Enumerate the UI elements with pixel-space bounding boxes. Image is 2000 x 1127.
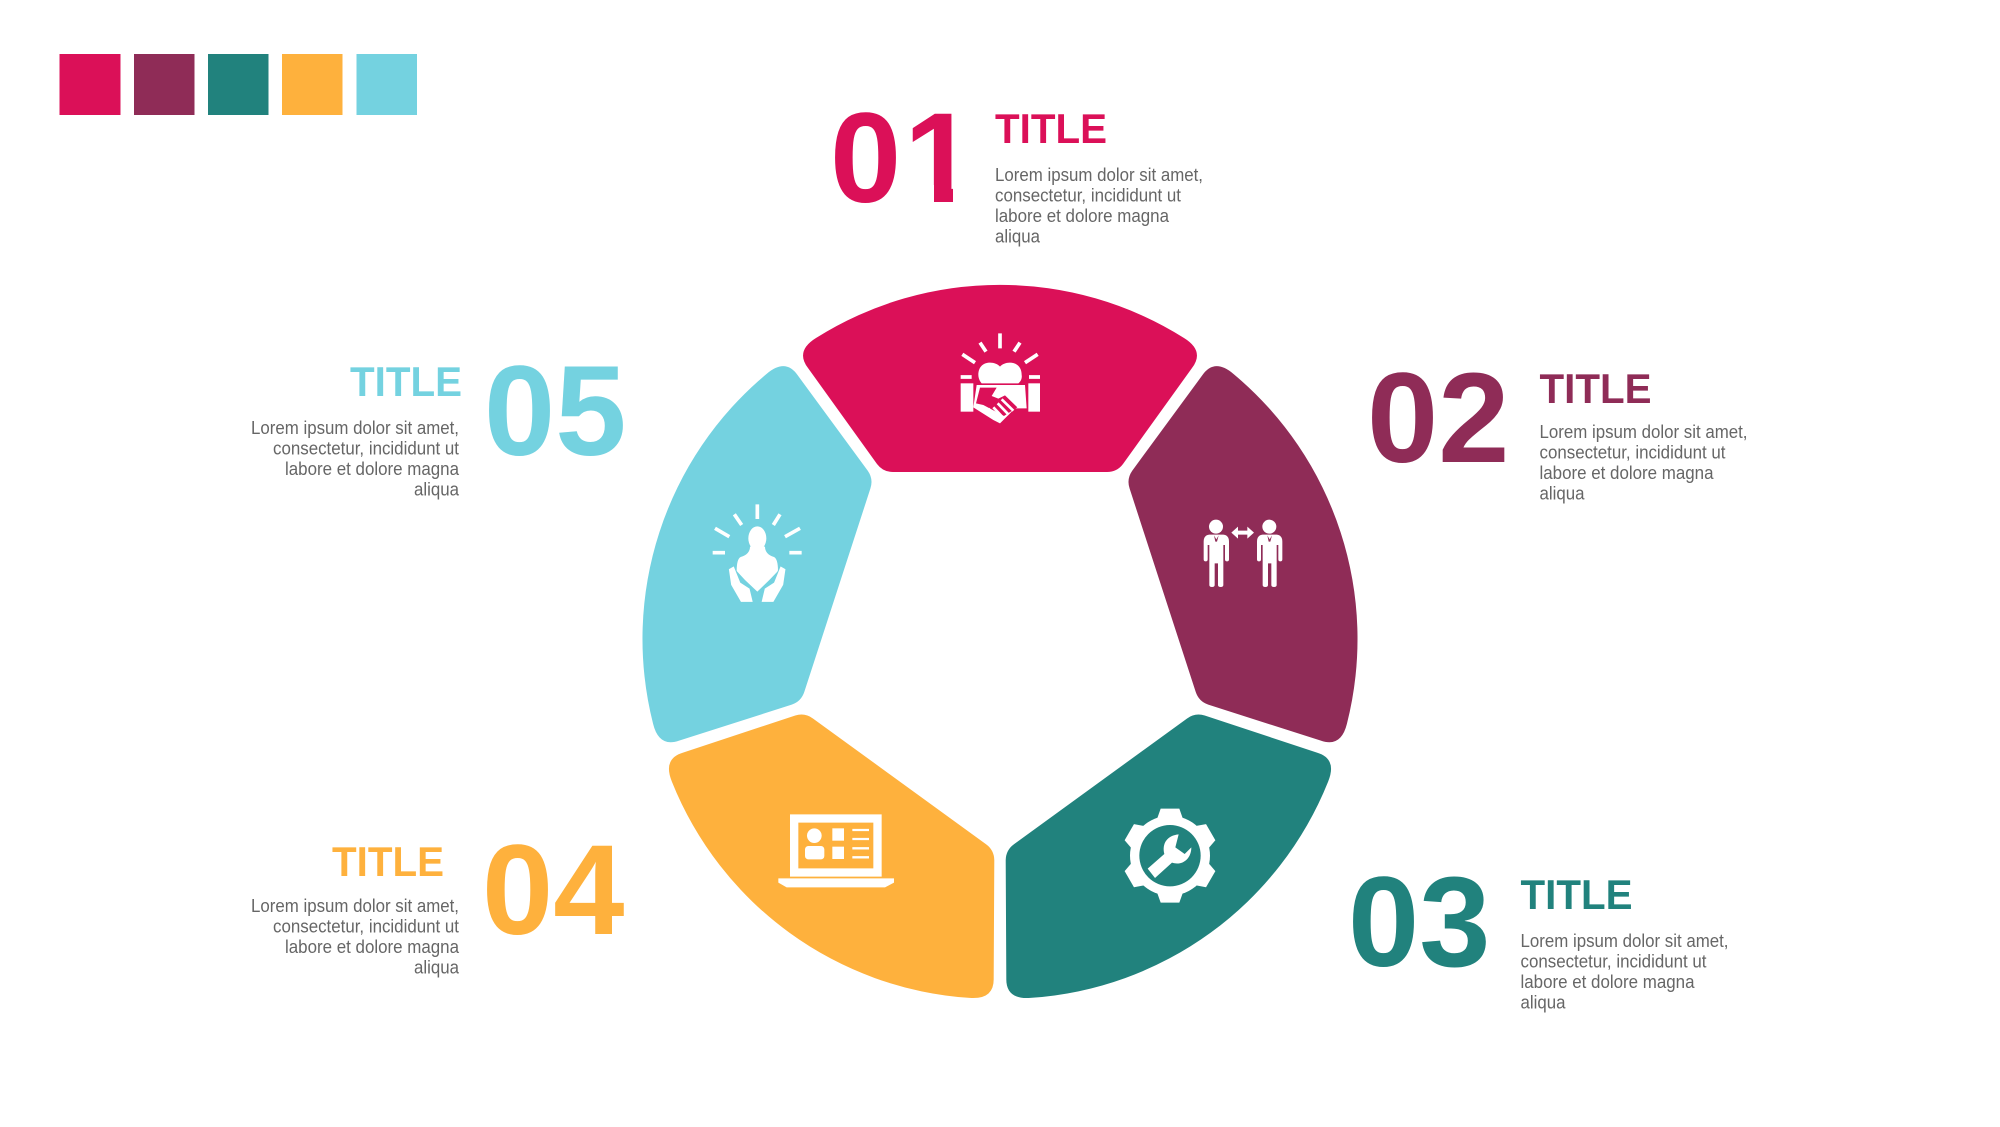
colour palette swatches [60, 54, 417, 115]
icon: handshake with heart [961, 333, 1040, 423]
body 05: consectetur, incididunt ut [273, 438, 459, 458]
body 05: aliqua [414, 480, 460, 500]
icon: person held in hands [713, 504, 802, 602]
body 03: Lorem ipsum dolor sit amet, [1520, 931, 1728, 951]
body 05 [251, 418, 460, 500]
body 01: consectetur, incididunt ut [995, 186, 1181, 206]
text block 02: 02 [1367, 347, 1509, 490]
body 04: aliqua [414, 958, 460, 978]
title 01: TITLE [995, 105, 1107, 152]
body 05: Lorem ipsum dolor sit amet, [251, 418, 459, 438]
body 01: Lorem ipsum dolor sit amet, [995, 165, 1203, 185]
body 02: aliqua [1540, 484, 1585, 504]
icon: two people keeping distance [1204, 520, 1282, 587]
ring segment 05 with person in hands icon [598, 345, 898, 777]
body 04: Lorem ipsum dolor sit amet, [251, 896, 459, 916]
text block 03 [1348, 851, 1728, 1012]
body 02: consectetur, incididunt ut [1540, 442, 1726, 462]
text block 05: 05 [484, 340, 626, 483]
text block 04 [251, 819, 624, 978]
ring segment 02 with two people icon [1102, 345, 1402, 777]
body 02: labore et dolore magna [1540, 463, 1714, 483]
body 04: consectetur, incididunt ut [273, 916, 459, 936]
body 01: aliqua [995, 226, 1041, 246]
body 05: labore et dolore magna [285, 459, 460, 479]
title 05: TITLE [350, 358, 462, 405]
body 03: labore et dolore magna [1520, 972, 1695, 992]
text block 02 [1367, 347, 1748, 504]
icon: laptop with profile screen [778, 814, 894, 887]
text block 01 [830, 87, 1203, 246]
body 01: labore et dolore magna [995, 206, 1170, 226]
ring segment 04 with laptop icon [630, 666, 1059, 1049]
body 01 [995, 165, 1203, 246]
ring segment 03 with gear and wrench icon [941, 666, 1370, 1049]
body 03: consectetur, incididunt ut [1520, 952, 1706, 972]
text block 04: 04 [482, 819, 624, 962]
icon: gear with wrench [1123, 809, 1217, 903]
text block 05 [251, 340, 626, 500]
ring segment 01 with handshake icon [803, 285, 1197, 472]
text block 03: 03 [1348, 851, 1490, 994]
body 03: aliqua [1520, 992, 1566, 1012]
text block 01: 0 [830, 87, 901, 230]
body 04 [251, 896, 460, 978]
title 03: TITLE [1520, 871, 1632, 918]
body 02 [1540, 422, 1748, 504]
title 02: TITLE [1540, 365, 1652, 412]
body 03 [1520, 931, 1728, 1012]
title 04: TITLE [332, 838, 444, 885]
text block 01: 1 [904, 87, 975, 230]
body 02: Lorem ipsum dolor sit amet, [1540, 422, 1748, 442]
body 04: labore et dolore magna [285, 937, 460, 957]
